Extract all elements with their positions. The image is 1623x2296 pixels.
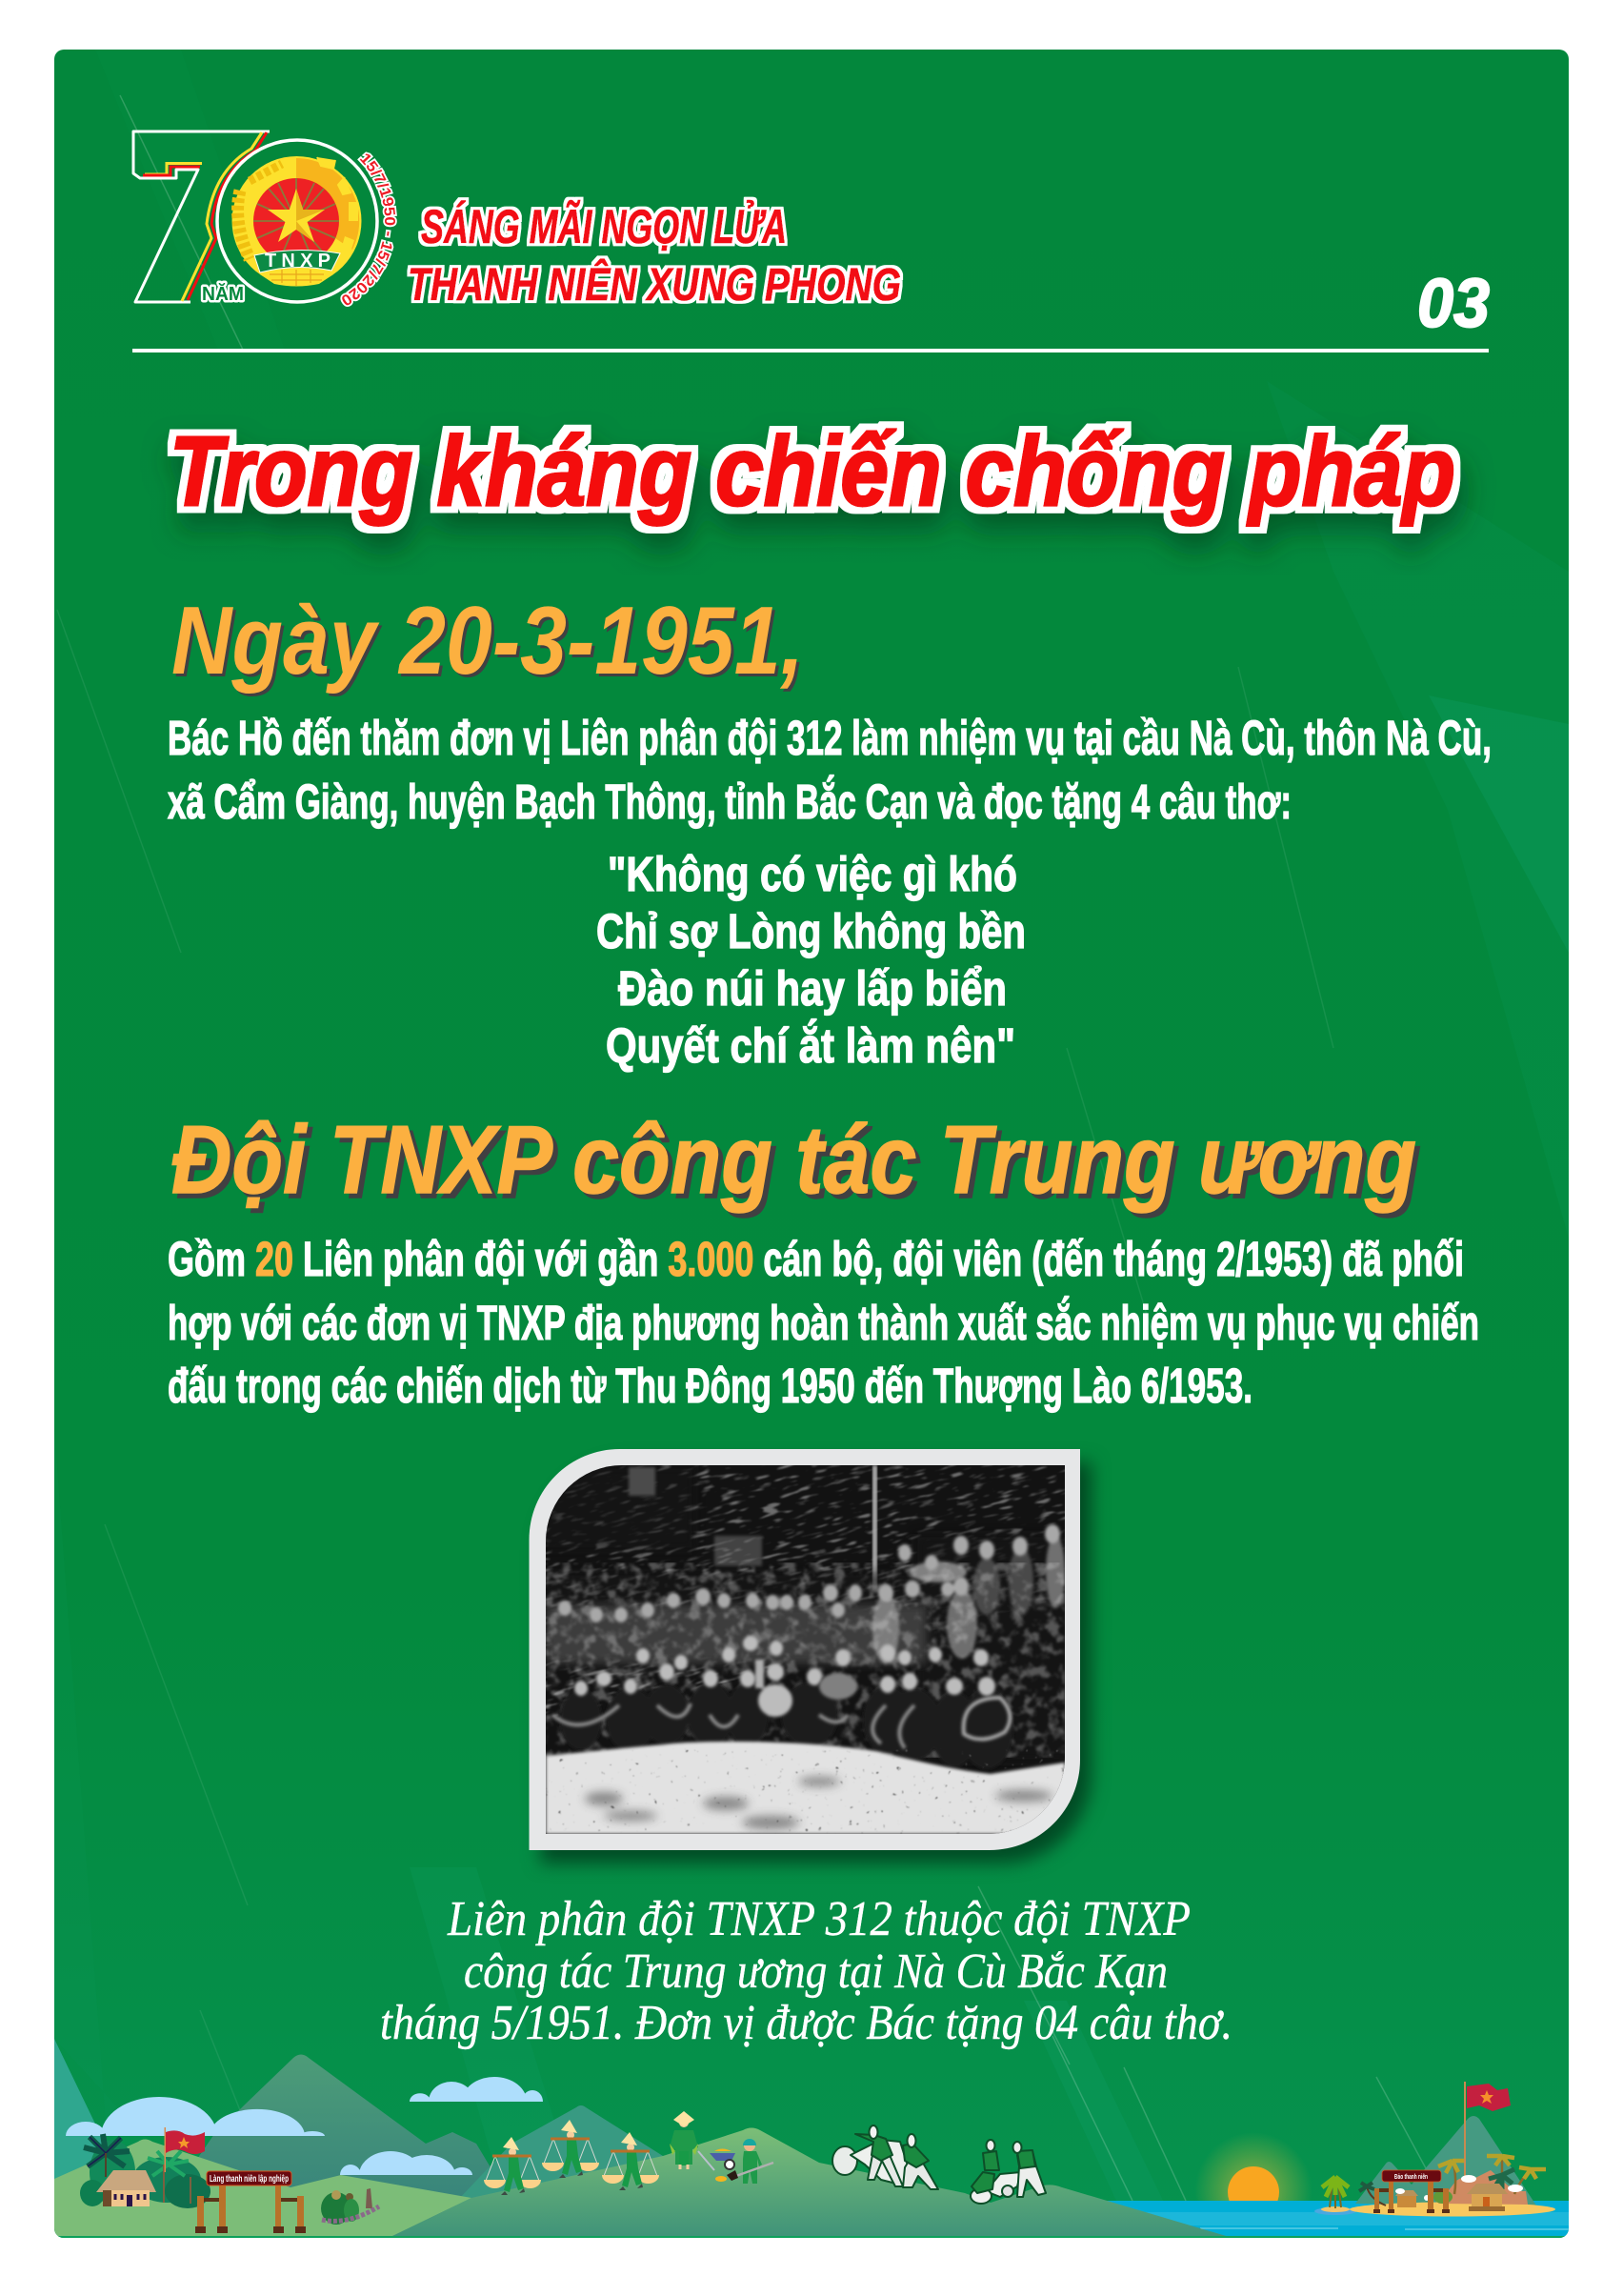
poem: Quyết chí ắt làm nên"	[606, 1017, 1015, 1073]
photo caption	[380, 1892, 1232, 2050]
tagline: THANH NIÊN XUNG PHONG	[408, 258, 901, 311]
main title: Trong kháng chiến chống pháp	[170, 416, 1455, 526]
island gate: Đảo thanh niên	[1394, 2174, 1428, 2181]
island flag	[1464, 2082, 1511, 2177]
photo caption: công tác Trung ương tại Nà Cù Bắc Kạn	[464, 1944, 1168, 1999]
group photograph: seated faces	[574, 1636, 995, 1696]
island mountains	[1355, 2116, 1536, 2205]
poem	[596, 847, 1026, 1073]
emblem: TNXP	[265, 251, 331, 272]
motorcycle group one	[832, 2125, 938, 2189]
flag: left	[164, 2127, 205, 2172]
palm trees and bushes	[80, 2134, 210, 2208]
main island	[1350, 2082, 1555, 2216]
group photograph: light clothing	[552, 1660, 1010, 1748]
group photograph: back row faces	[558, 1524, 1060, 1622]
teal left slope	[54, 2039, 101, 2238]
woman with conical hat	[670, 2111, 698, 2169]
header rule	[132, 349, 1489, 352]
photo frame	[530, 1449, 1101, 1873]
description paragraph	[168, 1232, 1479, 1413]
group photograph: crowd backdrop	[546, 1604, 927, 1663]
tagline: SÁNG MÃI NGỌN LỬA	[421, 199, 787, 253]
main green hill	[389, 2128, 1232, 2238]
outer ring	[217, 140, 377, 302]
photo caption: tháng 5/1951. Đơn vị được Bác tặng 04 câu thơ.	[380, 1996, 1232, 2050]
page number: 03	[1417, 266, 1490, 342]
porters	[484, 2120, 659, 2195]
poem: Đào núi hay lấp biển	[618, 961, 1007, 1016]
mountains	[198, 2054, 663, 2236]
clouds	[66, 2077, 543, 2175]
worker with shovel	[715, 2139, 773, 2184]
group photograph	[546, 1465, 1065, 1834]
island small hut	[1395, 2190, 1418, 2207]
numeral 7	[133, 131, 270, 302]
sun	[1198, 2136, 1309, 2201]
island rocks and palms	[1359, 2156, 1546, 2205]
anniversary dates: 15/7/1950 - 15/7/2020	[340, 151, 397, 307]
left green hill	[54, 2140, 471, 2238]
group photograph: standing row bodies	[872, 1536, 1065, 1663]
island sand	[1350, 2203, 1555, 2216]
group photograph: seated rows	[560, 1682, 1013, 1769]
heading: date: Ngày 20-3-1951,	[171, 588, 804, 695]
bottom edge	[54, 2236, 1569, 2238]
small island	[1314, 2177, 1356, 2215]
group photograph: sandy ground	[546, 1742, 1065, 1834]
poem: "Không có việc gì khó	[608, 847, 1017, 901]
logo: 70 years	[131, 130, 397, 307]
island small clouds	[1395, 2175, 1523, 2201]
photo caption: Liên phân đội TNXP 312 thuộc đội TNXP	[447, 1892, 1191, 1946]
village gate: Làng thanh niên lập nghiệp	[210, 2174, 289, 2185]
heading: central youth team: Đội TNXP công tác Trung ương	[171, 1107, 1416, 1214]
poem: Chỉ sợ Lòng không bền	[596, 904, 1026, 958]
seated group	[321, 2188, 379, 2225]
island main hut	[1467, 2184, 1508, 2211]
bottom landscape	[54, 2039, 1569, 2250]
stilt house	[96, 2170, 156, 2206]
wheelbarrow	[698, 2149, 735, 2170]
village gate	[195, 2171, 306, 2233]
intro paragraph	[168, 711, 1492, 829]
motorcycle group two	[971, 2140, 1046, 2204]
emblem	[232, 156, 362, 286]
nam label: NĂM	[202, 283, 244, 305]
group photograph: mottled tones	[546, 1562, 1065, 1758]
sea	[1095, 2201, 1569, 2238]
island gate	[1373, 2170, 1450, 2213]
tagline	[408, 199, 901, 311]
